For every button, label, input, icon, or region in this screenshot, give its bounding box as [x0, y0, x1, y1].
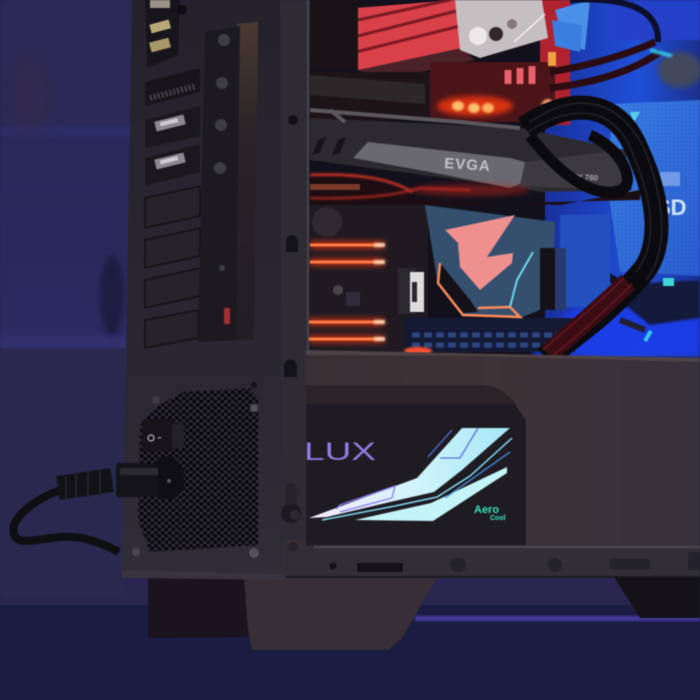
psu shroud	[281, 350, 700, 578]
vertical retention bracket	[198, 22, 258, 342]
graphics card	[308, 110, 640, 205]
ssd panel	[600, 100, 700, 325]
lux text: LUX	[304, 438, 376, 466]
rear panel of case	[122, 0, 310, 578]
aerocool logo text: Cool	[490, 515, 506, 522]
evga logo text: EVGA	[444, 155, 491, 175]
centre case foot	[244, 578, 437, 650]
psu perforated grille	[132, 382, 259, 558]
right dark foot	[614, 577, 700, 618]
expansion slot covers	[145, 68, 200, 348]
power switch	[142, 420, 184, 450]
io ports	[145, 0, 187, 68]
bottom edge of rear panel	[122, 570, 284, 580]
aerocool logo text	[474, 504, 506, 522]
cpu cooler fins	[310, 0, 475, 76]
glowing logo graphic	[309, 428, 512, 521]
aerocool logo text: Aero	[474, 504, 499, 516]
vrm heatsink with red and orange lights	[310, 0, 672, 122]
power cable bundle	[525, 103, 674, 358]
ram slots glowing	[308, 245, 432, 355]
power cable and plug	[13, 455, 184, 552]
gtx model text: GTX 760	[566, 172, 599, 183]
left dark foot	[148, 577, 250, 638]
cpu cooler block	[455, 0, 582, 58]
aorus chipset shroud	[425, 205, 555, 318]
ssd panel: SD	[656, 195, 687, 220]
lit psu window	[304, 385, 526, 545]
motherboard	[308, 200, 610, 352]
red glow under top bar	[410, 184, 530, 196]
